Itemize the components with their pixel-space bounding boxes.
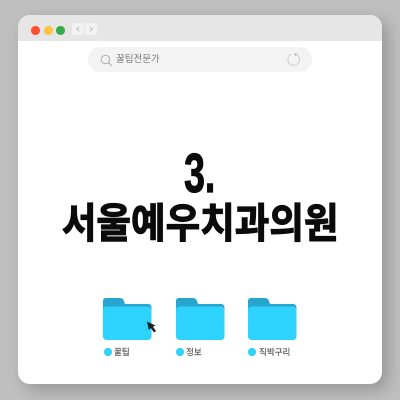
- icon: red window button: [31, 26, 40, 34]
- browser title bar: [18, 15, 382, 41]
- title line 2: 서울예우치과의원: [62, 201, 338, 247]
- icon: mouse cursor: [147, 322, 156, 332]
- label: 꿀팁: 꿀팁: [114, 347, 130, 357]
- icon: reload: [287, 53, 300, 66]
- icon: folder 1: [103, 298, 152, 340]
- legend dot 3: [248, 348, 256, 356]
- search text: 꿀팁전문가: [116, 54, 160, 65]
- icon: yellow window button: [44, 26, 52, 34]
- label: 직박구리: 직박구리: [259, 347, 290, 357]
- label: 정보: 정보: [186, 347, 202, 357]
- search bar: [88, 47, 312, 72]
- icon: forward button: [85, 23, 97, 35]
- icon: green window button: [56, 26, 64, 34]
- legend dot 1: [104, 348, 112, 356]
- title line 1: 3.: [184, 144, 216, 204]
- icon: magnifier: [100, 54, 112, 66]
- legend dot 2: [176, 348, 184, 356]
- icon: folder 2: [176, 298, 224, 340]
- icon: back button: [72, 23, 84, 35]
- icon: folder 3: [248, 298, 296, 340]
